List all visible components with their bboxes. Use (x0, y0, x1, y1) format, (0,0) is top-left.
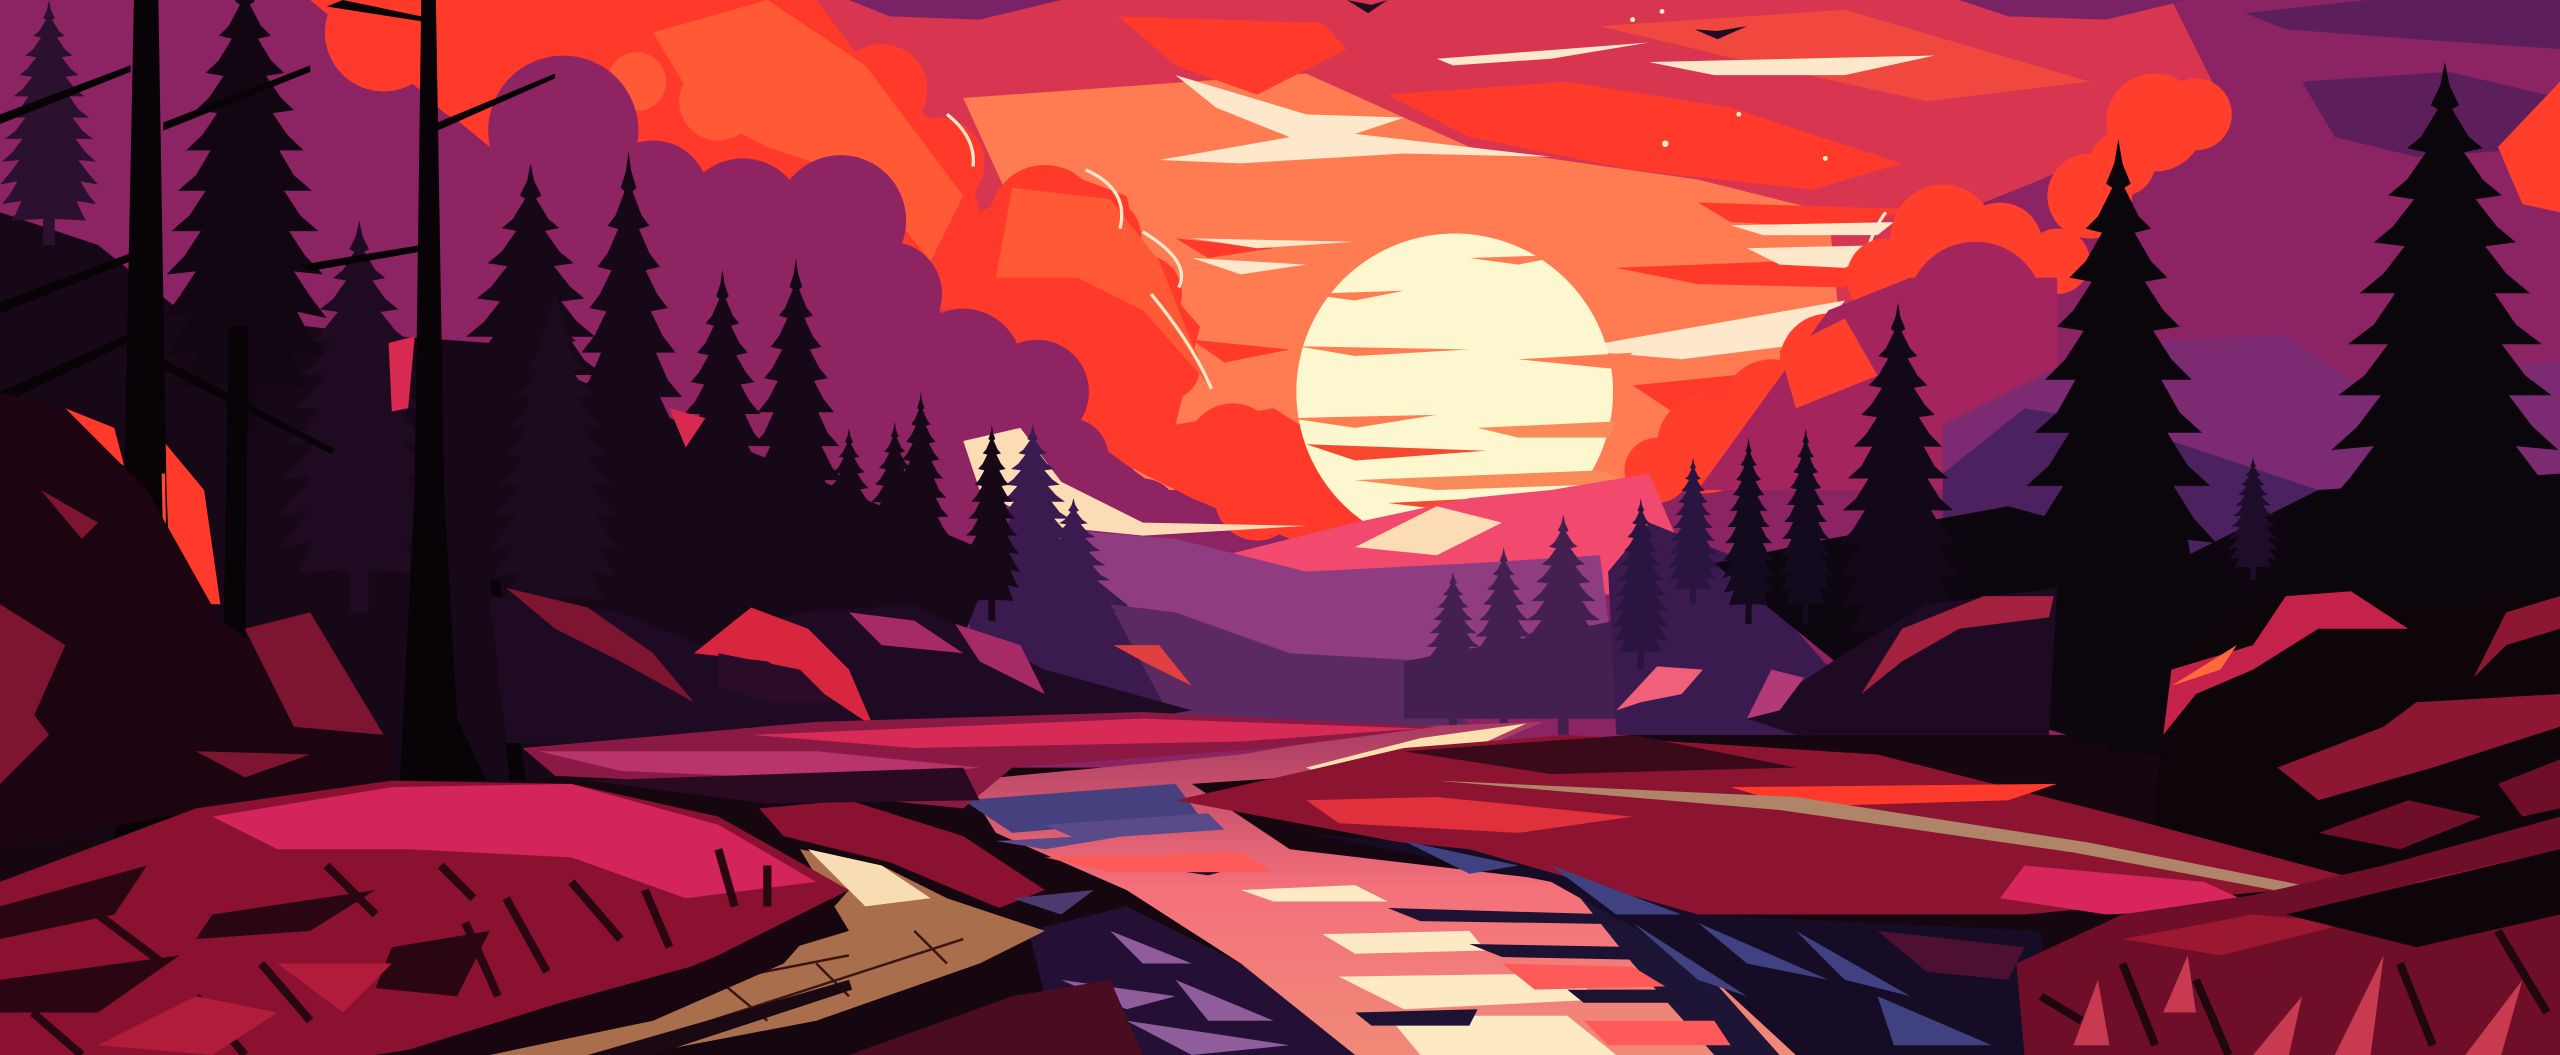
left pine trees (0, 0, 1020, 665)
right forest base (1714, 474, 2560, 817)
red sky streaks (1118, 10, 2090, 418)
mid-ground shrubs (490, 588, 1192, 743)
river (963, 722, 1796, 1055)
right foreground grass (2016, 817, 2560, 1055)
sun (1290, 234, 1633, 550)
crimson bank left of river (759, 800, 1045, 908)
right cloud mass (1624, 73, 2560, 503)
ground base (0, 702, 2560, 1055)
red glints between trunks (65, 336, 705, 604)
tall left trunks (0, 0, 555, 866)
left foreground grass (0, 781, 849, 1055)
far purple treeline and hills (963, 425, 1845, 735)
purple cloud (488, 56, 1216, 550)
orange trunk rim light (163, 474, 209, 852)
cream wisps in sky (1159, 42, 1935, 359)
top right dark purple clouds (849, 0, 2560, 157)
distant mountains (963, 335, 2560, 686)
right riverbank (1176, 735, 2367, 915)
right pine trees (1613, 62, 2560, 751)
stone path (424, 849, 1143, 1055)
dark blue rock bank (1306, 833, 2057, 1055)
small birds and stars (1347, 0, 1828, 161)
left foliage by the trunks (0, 392, 392, 849)
left dark forest base (0, 212, 996, 849)
cloud highlight arcs (947, 98, 2139, 389)
right mid-ground bushes (1616, 588, 2560, 1055)
left cloud mass: red and orange (310, 0, 1420, 552)
purple rocks left of river (1012, 890, 1355, 1055)
far left riverbank (522, 712, 1437, 808)
